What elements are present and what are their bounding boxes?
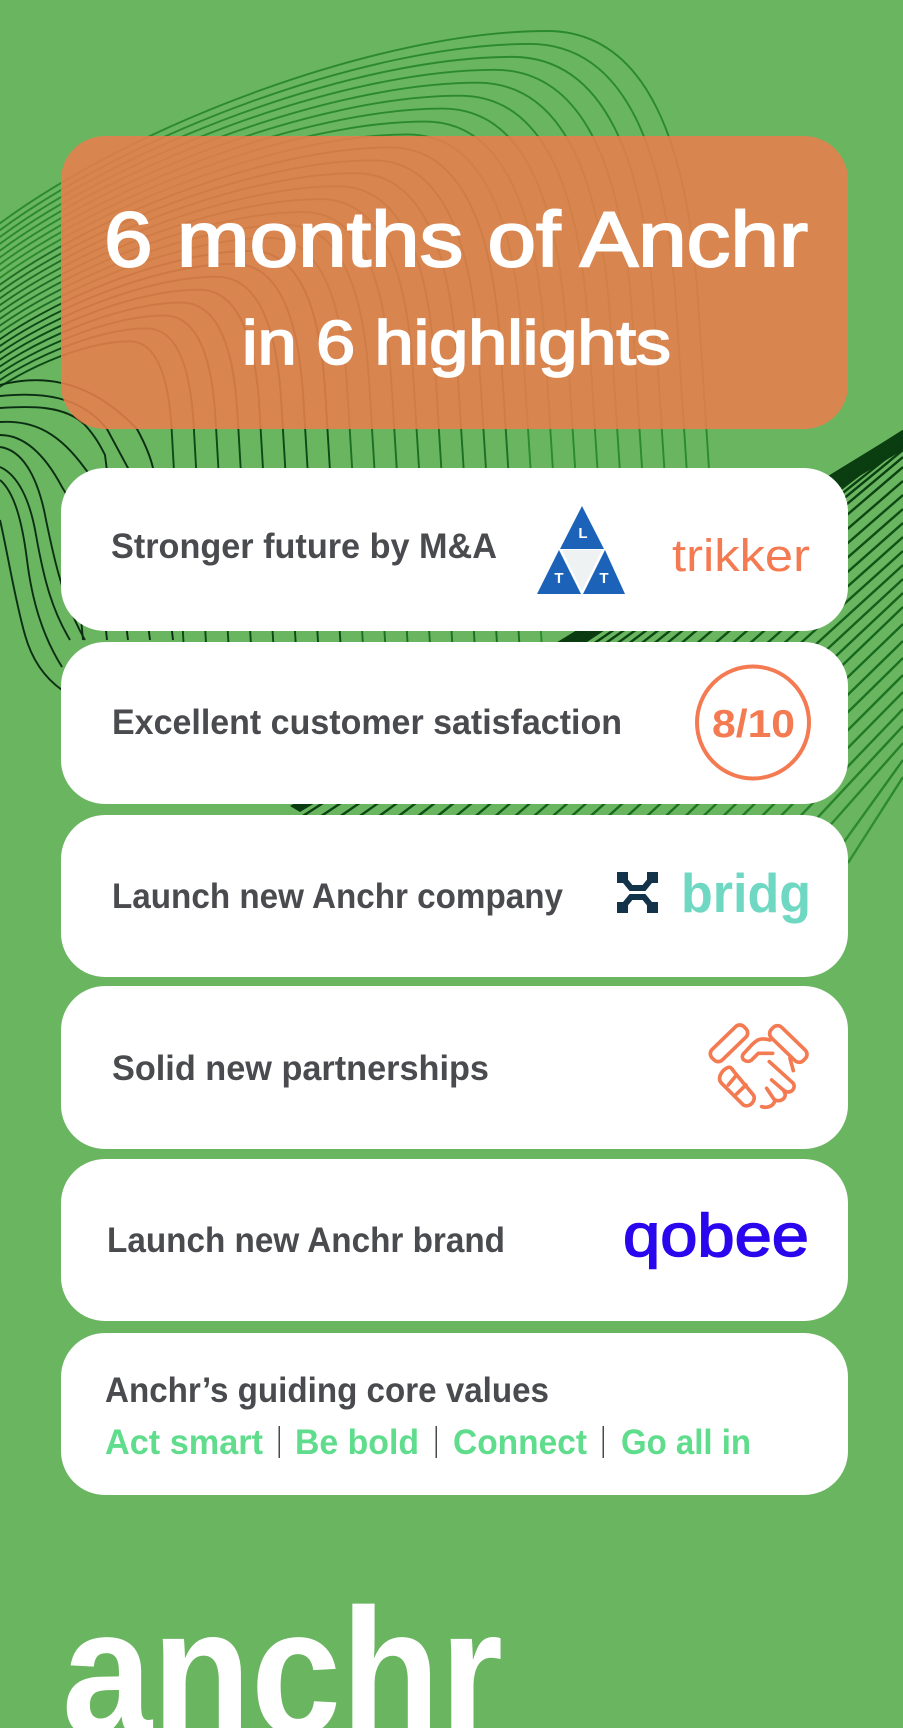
background contour lines bbox=[0, 30, 903, 864]
title line 1: 6 months of Anchr bbox=[104, 195, 808, 283]
card: new company bbox=[61, 815, 848, 977]
value: be bold: Be bold bbox=[295, 1423, 419, 1462]
card: core values bbox=[61, 1333, 848, 1495]
value: act smart: Act smart bbox=[105, 1423, 263, 1462]
title line 2: in 6 highlights bbox=[242, 309, 671, 378]
text: solid new partnerships: Solid new partnerships bbox=[112, 1049, 489, 1088]
text: excellent customer satisfaction: Excellent customer satisfaction bbox=[112, 703, 622, 742]
logo: LTT triangle: L bbox=[578, 525, 588, 542]
score badge 8/10: 8/10 bbox=[712, 703, 795, 746]
logo: bridg wordmark: bridg bbox=[681, 862, 811, 924]
card: M&A bbox=[61, 468, 848, 631]
card: customer satisfaction bbox=[61, 642, 848, 804]
card: new brand bbox=[61, 1159, 848, 1321]
title panel bbox=[61, 136, 848, 429]
text: guiding core values: Anchr’s guiding core values bbox=[105, 1371, 549, 1410]
logo: LTT triangle: T bbox=[554, 570, 564, 587]
text: stronger future: Stronger future by M&A bbox=[111, 527, 497, 566]
icon: handshake bbox=[708, 1023, 809, 1107]
value: go all in: Go all in bbox=[621, 1423, 751, 1462]
logo: trikker: trikker bbox=[672, 530, 810, 581]
text: launch new Anchr company: Launch new Anchr company bbox=[112, 877, 564, 916]
text: launch new Anchr brand: Launch new Anchr brand bbox=[107, 1221, 505, 1260]
logo: qobee: qobee bbox=[623, 1202, 809, 1269]
title panel background bbox=[61, 136, 848, 429]
score badge 8/10 bbox=[697, 666, 809, 778]
logo: bridg icon bbox=[617, 872, 658, 913]
logo: LTT triangle: T bbox=[599, 570, 609, 587]
value: connect: Connect bbox=[453, 1423, 587, 1462]
card: partnerships bbox=[61, 986, 848, 1149]
logo: LTT triangle bbox=[537, 506, 625, 594]
